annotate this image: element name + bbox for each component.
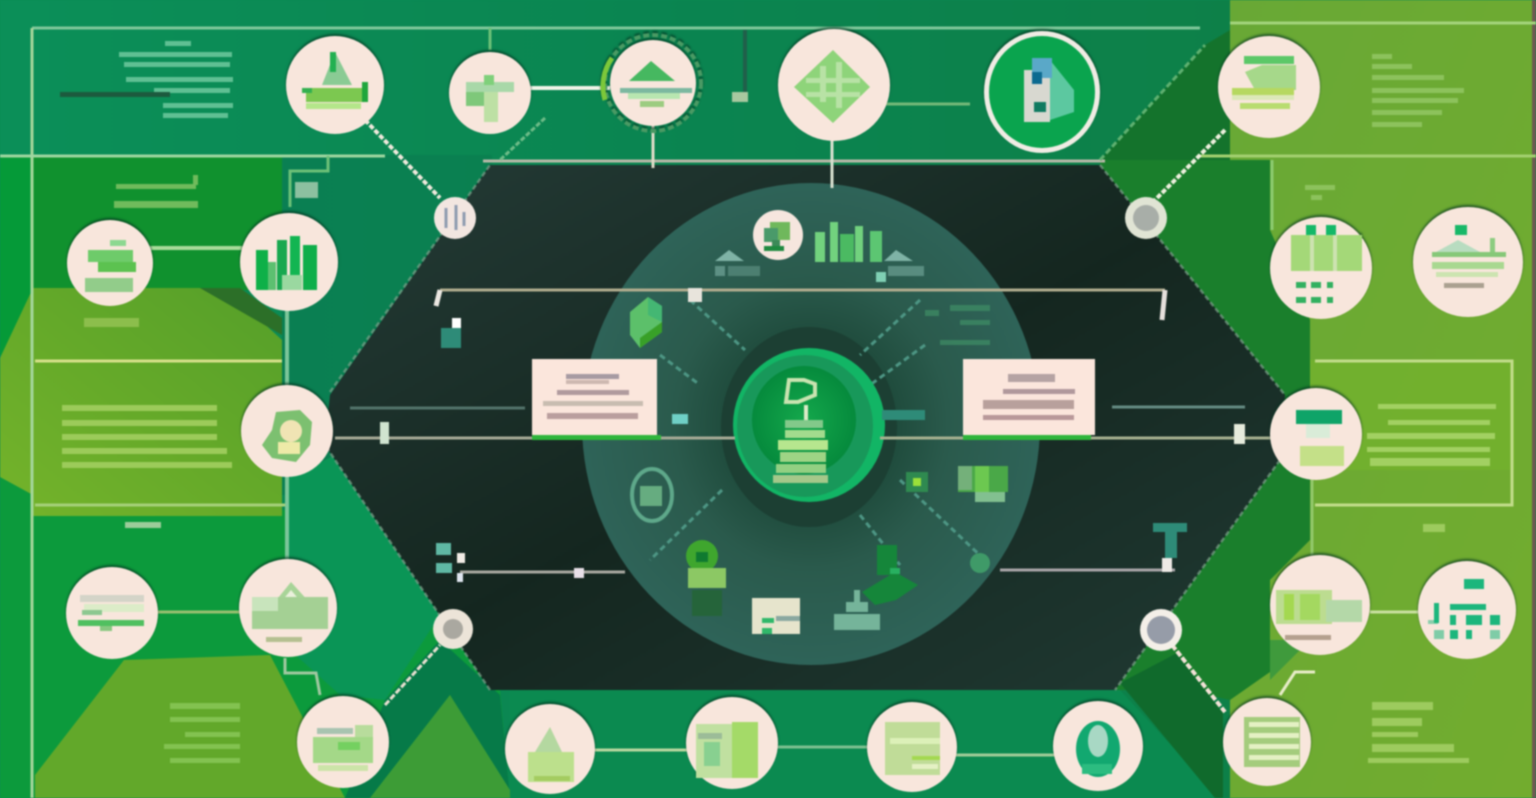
text block: top left <box>60 41 233 118</box>
icon: tree badge <box>753 210 803 260</box>
callout: right card <box>963 359 1095 440</box>
node: top left roof <box>286 36 384 134</box>
node: left bar chart <box>240 213 338 311</box>
node: small lower left junction <box>433 609 473 649</box>
node: lower right table <box>1270 555 1370 655</box>
node: right upper chart <box>1270 217 1372 319</box>
node: bottom left truck <box>297 696 389 788</box>
icon: pale tree <box>834 590 880 630</box>
small top hanging glyph <box>732 92 748 102</box>
text block: top right <box>1305 54 1464 200</box>
node: bottom doc <box>867 702 957 792</box>
node: top center boat <box>603 35 701 131</box>
node: bottom folder <box>686 697 778 789</box>
dark hexagon panel <box>325 165 1285 690</box>
node: small upper left junction <box>434 197 476 239</box>
text block: mid left <box>62 405 232 468</box>
node: top tree sign <box>449 52 531 134</box>
icon: small star <box>906 472 928 492</box>
text block: lower left <box>125 522 240 763</box>
node: small lower right junction <box>1140 609 1182 651</box>
icon: left roof <box>715 250 760 276</box>
node: bottom right list <box>1223 698 1311 786</box>
text block: mid right <box>1367 404 1496 466</box>
node: mid right tree <box>1270 388 1362 480</box>
disc spokes <box>650 300 985 565</box>
node: top right layers <box>1218 36 1320 138</box>
central disc <box>582 183 1040 665</box>
small teal glyphs on dark panel <box>436 328 1187 573</box>
node: lower left pill <box>66 567 158 659</box>
connector lines between nodes <box>150 88 1420 755</box>
icon: small dot <box>970 553 990 573</box>
disc icons <box>630 210 1008 634</box>
icon: right roof <box>876 250 924 282</box>
node: lower left house <box>239 559 337 657</box>
icon: green person box <box>686 540 726 616</box>
inner horizontal connectors <box>335 288 1275 582</box>
node: top bottle badge <box>984 31 1100 153</box>
node: bottom bulb <box>1053 701 1143 791</box>
icon: bars <box>815 222 882 262</box>
icon: shield <box>632 469 672 521</box>
icon: green hexagon <box>630 297 662 348</box>
node: bottom bag <box>505 704 595 794</box>
text block: upper left label <box>84 175 318 327</box>
icon: faint top right grid <box>925 305 990 345</box>
callout: left card <box>532 359 661 440</box>
node: top center grid <box>778 29 890 141</box>
node: small upper right junction <box>1125 197 1167 239</box>
icon: green blocks <box>958 466 1008 502</box>
icon: central stacked tower <box>773 380 828 483</box>
node: far right hills <box>1413 207 1523 317</box>
node: left small basket <box>67 220 153 306</box>
text block: lower right <box>1368 524 1469 763</box>
icon: white card <box>752 598 800 634</box>
node: lower right grid <box>1418 561 1516 659</box>
icon: dark green tree <box>862 545 918 605</box>
node: mid left person <box>241 385 333 477</box>
